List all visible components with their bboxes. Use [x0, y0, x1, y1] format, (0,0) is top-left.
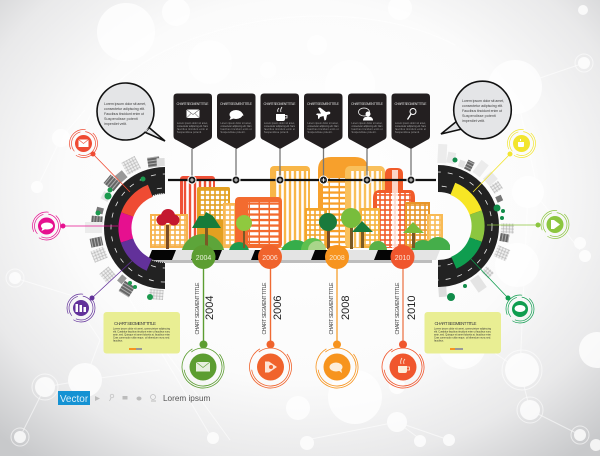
- panel: right yellow note: Cras commodo nulla neque, ut bibendum nunc sed.: [434, 336, 491, 340]
- panel: left yellow note: ante, sed. Quisque sit amet lobortis at, faucibus enim: [113, 334, 170, 336]
- panel: black card 4 plane: [304, 94, 342, 149]
- right road: [438, 165, 499, 287]
- timeline node 2008: 2008: [340, 296, 352, 320]
- panel: black card 2 chat: faucibus tincidunt enim ut: [220, 128, 252, 131]
- timeline node 2008: [310, 245, 364, 394]
- timeline node 2004: CHART SEGMENT TITLE: [195, 282, 201, 334]
- vector badge: Vector: [60, 394, 89, 405]
- timeline node 2006: CHART SEGMENT TITLE: [262, 282, 268, 334]
- timeline node 2006: 2006: [262, 255, 278, 262]
- callout: left speech bubble: imperdiet velit.: [104, 122, 127, 126]
- panel: black card 3 coffee: consectetur adipiscing elit. Nam: [264, 125, 295, 128]
- panel: black card 5 user cloud: [348, 94, 386, 149]
- road band: [148, 250, 440, 263]
- panel: black card 4 plane: CHART SEGMENT TITLE: [307, 102, 340, 106]
- far buildings: [180, 157, 415, 248]
- icon node: lime play: [487, 210, 569, 238]
- callout: left speech bubble: [97, 83, 165, 141]
- panel: black card 1 mail: CHART SEGMENT TITLE: [176, 102, 209, 106]
- panel: black card 5 user cloud: Suspendisse potenti.: [352, 131, 377, 134]
- panel: right yellow note: Lorem ipsum dolor sit amet, consectetuer adipiscing: [434, 328, 492, 330]
- panel: left yellow note: [104, 312, 180, 354]
- panel: right yellow note: ante, sed. Quisque sit amet lobortis at, faucibus enim: [434, 334, 491, 336]
- icon node: green chat: [470, 258, 534, 323]
- icon node: yellow coffee: [473, 130, 536, 192]
- panel: black card 6 search: consectetur adipiscing elit. Nam: [395, 125, 426, 128]
- panel: black card 3 coffee: Lorem ipsum dolor sit amet,: [264, 122, 295, 125]
- footer label: Lorem ipsum: [163, 394, 211, 403]
- panel: black card 2 chat: Suspendisse potenti.: [220, 131, 246, 134]
- timeline node 2006: [244, 245, 297, 394]
- panel: black card 3 coffee: [260, 94, 299, 149]
- panel: black card 1 mail: Suspendisse potenti.: [177, 131, 202, 134]
- panel: right yellow note: faucibus.: [434, 340, 444, 342]
- panel: black card 2 chat: Lorem ipsum dolor sit amet,: [220, 122, 252, 125]
- panel: black card 4 plane: faucibus tincidunt enim ut: [308, 128, 339, 131]
- callout: left speech bubble: Lorem ipsum dolor sit amet,: [104, 102, 146, 106]
- timeline node 2004: 2004: [196, 255, 211, 262]
- panel: right yellow note: [424, 312, 501, 354]
- timeline node 2006: 2006: [272, 296, 284, 320]
- panel: left yellow note: Lorem ipsum dolor sit amet, consectetuer adipiscing: [113, 328, 171, 330]
- panel: black card 5 user cloud: CHART SEGMENT TITLE: [351, 102, 384, 106]
- city skyline: [150, 157, 450, 250]
- panel: left yellow note: elit. Curabitur faucibus tincidunt enim ut faucibus nunc: [113, 330, 171, 334]
- timeline node 2008: CHART SEGMENT TITLE: [329, 282, 335, 334]
- timeline node 2010: 2010: [395, 255, 410, 262]
- panel: black card 6 search: Suspendisse potenti.: [395, 131, 420, 134]
- panel: black card 1 mail: faucibus tincidunt enim ut: [177, 128, 208, 131]
- panel: left yellow note: faucibus.: [113, 340, 123, 342]
- panel: black card 3 coffee: faucibus tincidunt enim ut: [264, 128, 295, 131]
- panel: right yellow note: elit. Curabitur faucibus tincidunt enim ut faucibus nunc: [434, 330, 492, 334]
- callout: left speech bubble: consectetur adipiscing elit.: [104, 107, 145, 111]
- panel: black card 1 mail: [174, 94, 212, 149]
- callout: right speech bubble: Suspendisse potenti: [462, 114, 496, 118]
- timeline node 2008: 2008: [329, 255, 345, 262]
- timeline node 2010: 2010: [406, 296, 418, 320]
- timeline node 2004: [176, 245, 230, 394]
- panel: black card 3 coffee: Suspendisse potenti.: [264, 131, 289, 134]
- panel: black card 4 plane: consectetur adipiscing elit. Nam: [308, 125, 339, 128]
- callout: right speech bubble: [441, 81, 511, 139]
- panel: black card 1 mail: Lorem ipsum dolor sit amet,: [177, 122, 208, 125]
- panel: black card 2 chat: [217, 94, 256, 149]
- panel: black card 5 user cloud: consectetur adipiscing elit. Nam: [352, 125, 383, 128]
- panel: black card 6 search: faucibus tincidunt enim ut: [395, 128, 426, 131]
- panel: black card 6 search: CHART SEGMENT TITLE: [394, 102, 427, 106]
- panel: right yellow note: CHART SEGMENT TITLE: [434, 321, 476, 326]
- panel: black card 4 plane: Lorem ipsum dolor sit amet,: [308, 122, 339, 125]
- callout: right speech bubble: consectetur adipiscing elit.: [462, 104, 503, 108]
- right roadside buildings: [437, 144, 514, 301]
- trees: [156, 208, 424, 249]
- vector badge: [58, 391, 90, 405]
- panel: black card 2 chat: consectetur adipiscing elit. Nam: [220, 125, 252, 128]
- panel: black card 6 search: [392, 94, 430, 149]
- callout: left speech bubble: Suspendisse potenti: [104, 117, 138, 121]
- left roadside buildings: [85, 156, 165, 300]
- icon node: purple chart: [67, 260, 133, 322]
- hills: [182, 234, 450, 250]
- left road: [104, 167, 165, 289]
- small toolbar icons: [95, 394, 156, 401]
- callout: right speech bubble: imperdiet velit.: [462, 119, 485, 123]
- icon node: magenta chat: [32, 212, 118, 240]
- panel: black card 5 user cloud: faucibus tincidunt enim ut: [352, 128, 383, 131]
- panel: left yellow note: Cras commodo nulla neque, ut bibendum nunc sed.: [113, 336, 170, 340]
- timeline node 2004: 2004: [204, 296, 216, 320]
- horizontal timeline: [168, 149, 436, 184]
- panel: left yellow note: CHART SEGMENT TITLE: [114, 321, 156, 326]
- callout: right speech bubble: Faucibus tincidunt enim ut: [462, 109, 502, 113]
- timeline node 2010: [376, 245, 430, 394]
- callout: left speech bubble: Faucibus tincidunt enim ut: [104, 112, 144, 116]
- icon node: red mail: [70, 130, 130, 192]
- panel: black card 4 plane: Suspendisse potenti.: [308, 131, 333, 134]
- panel: black card 2 chat: CHART SEGMENT TITLE: [220, 102, 253, 106]
- panel: black card 1 mail: consectetur adipiscing elit. Nam: [177, 125, 208, 128]
- timeline node 2010: CHART SEGMENT TITLE: [395, 282, 401, 334]
- callout: right speech bubble: Lorem ipsum dolor sit amet,: [462, 99, 504, 103]
- panel: black card 5 user cloud: Lorem ipsum dolor sit amet,: [352, 122, 383, 125]
- panel: black card 6 search: Lorem ipsum dolor sit amet,: [395, 122, 426, 125]
- panel: black card 3 coffee: CHART SEGMENT TITLE: [264, 102, 296, 106]
- near buildings: [150, 187, 443, 248]
